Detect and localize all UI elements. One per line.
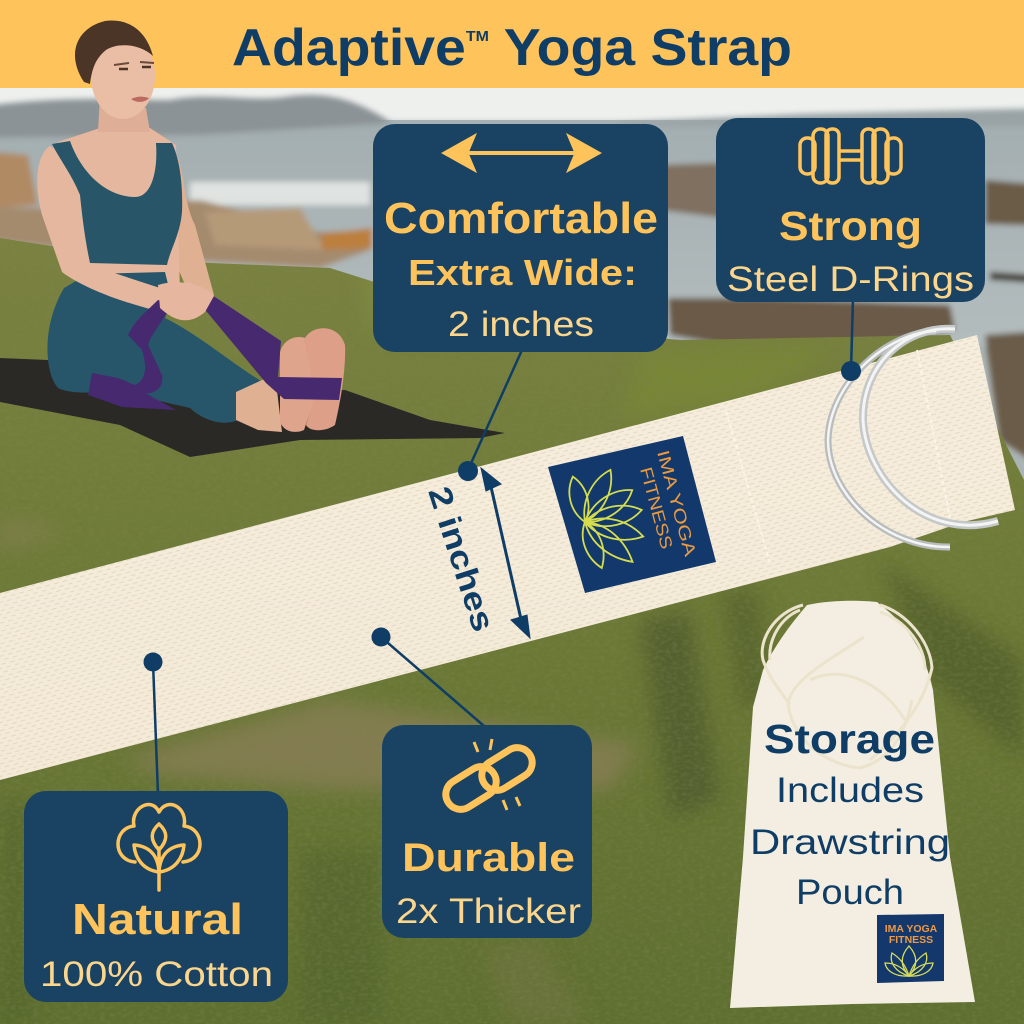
panel: strong: Strong: [779, 203, 922, 249]
icon: lotus: [565, 466, 645, 571]
panel: storage pouch: Drawstring: [750, 823, 950, 862]
purple strap: [88, 295, 342, 410]
icon: chain link: [440, 739, 538, 815]
width dimension label: 2 inches: [421, 482, 502, 636]
strap brand label: IMA YOGA: [653, 448, 700, 559]
icon: cotton: [118, 805, 200, 890]
icon: small lotus: [885, 946, 933, 976]
hands: [158, 282, 214, 320]
ankle: [236, 374, 282, 432]
title: Yoga Strap: [504, 19, 792, 77]
panel: natural: 100% Cotton: [40, 955, 273, 994]
near arm: [37, 146, 205, 314]
header banner: [0, 0, 1024, 88]
tank top: [52, 141, 182, 265]
strap brand label: FITNESS: [636, 465, 676, 551]
panel: durable: 2x Thicker: [396, 892, 581, 931]
panel: comfortable extra wide: Comfortable: [384, 194, 658, 243]
panel: comfortable extra wide: 2 inches: [448, 305, 594, 344]
steel D-rings: [828, 329, 998, 547]
drawstring: [762, 605, 932, 768]
panel: storage pouch: Storage: [764, 716, 935, 762]
yoga mat: [0, 358, 505, 457]
icon: dumbbell: [800, 129, 901, 183]
woman seated with strap: [37, 21, 345, 432]
panel: durable: Durable: [402, 836, 575, 880]
far arm: [170, 148, 214, 310]
panel: natural: [24, 791, 288, 1002]
icon: double arrow: [442, 134, 601, 172]
head and hair: [75, 21, 155, 132]
panel: durable: [382, 725, 592, 938]
width dimension arrow: [481, 468, 530, 638]
torso skin: [58, 128, 180, 292]
pouch label: IMA YOGA: [885, 923, 938, 935]
panel: comfortable extra wide: Extra Wide:: [408, 252, 637, 293]
soles of feet: [280, 337, 316, 432]
callout connectors: [153, 298, 853, 795]
panel: strong: [716, 118, 985, 302]
panel: comfortable extra wide: [373, 124, 668, 352]
strap brand label: [548, 436, 716, 593]
panel: natural: Natural: [72, 895, 243, 944]
callout dots: [144, 361, 861, 672]
pouch label: FITNESS: [889, 934, 933, 946]
title: TM: [466, 28, 489, 45]
panel: storage pouch: [730, 601, 975, 1008]
panel: storage pouch: Pouch: [796, 873, 904, 912]
cotton strap: [0, 335, 1015, 780]
title: Adaptive: [232, 19, 452, 77]
pouch label: [877, 914, 944, 983]
leggings: [47, 272, 268, 423]
panel: strong: Steel D-Rings: [727, 260, 974, 299]
panel: storage pouch: Includes: [776, 771, 924, 810]
pouch body: [730, 601, 975, 1008]
